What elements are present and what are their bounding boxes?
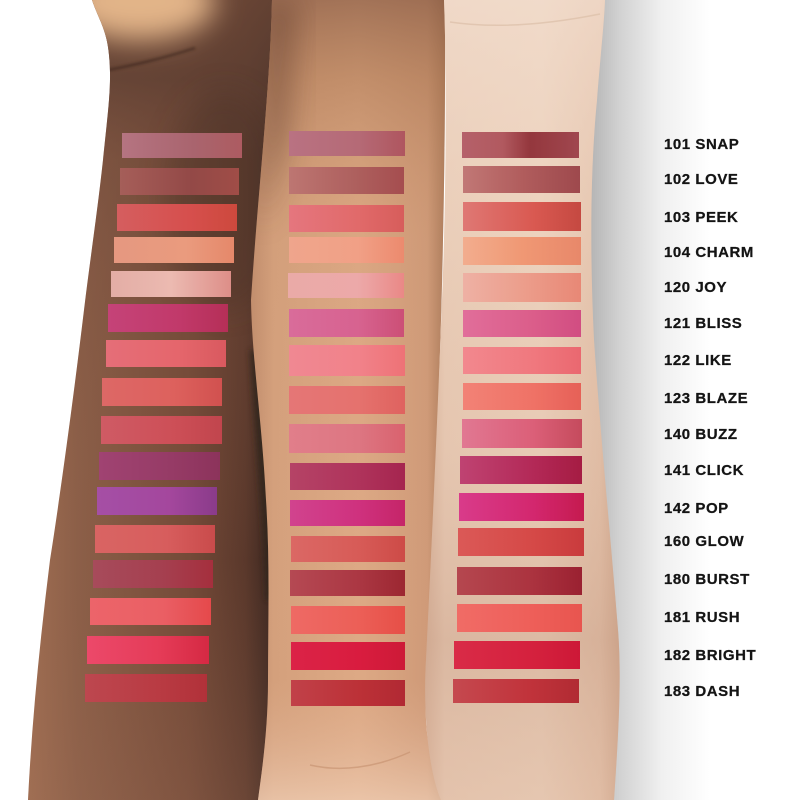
- label: 120 JOY: 120 JOY: [664, 279, 727, 296]
- background shadow: [590, 0, 710, 800]
- swatch: 123 BLAZE, fair: [463, 383, 581, 410]
- swatch: 183 DASH, deep: [85, 674, 207, 702]
- swatch: 142 POP, medium: [290, 500, 405, 526]
- swatch: 121 BLISS, fair: [463, 310, 581, 337]
- label: 122 LIKE: 122 LIKE: [664, 352, 732, 369]
- label: 123 BLAZE: 123 BLAZE: [664, 390, 748, 407]
- swatch: 104 CHARM, deep: [114, 237, 234, 263]
- swatch: 141 CLICK, medium: [290, 463, 405, 490]
- swatch: 103 PEEK, medium: [289, 205, 404, 232]
- swatch: 121 BLISS, medium: [289, 309, 404, 337]
- swatch: 140 BUZZ, fair: [462, 419, 582, 448]
- swatch: 181 RUSH, fair: [457, 604, 582, 632]
- swatch: 122 LIKE, deep: [106, 340, 226, 367]
- label: 160 GLOW: 160 GLOW: [664, 533, 744, 550]
- label: 102 LOVE: 102 LOVE: [664, 171, 738, 188]
- swatch: 120 JOY, fair: [463, 273, 581, 302]
- swatch: 120 JOY, deep: [111, 271, 231, 297]
- arm: fair skin tone: [425, 0, 620, 800]
- label: 141 CLICK: 141 CLICK: [664, 462, 744, 479]
- swatch: 141 CLICK, fair: [460, 456, 582, 484]
- swatch: 104 CHARM, fair: [463, 237, 581, 265]
- label: 121 BLISS: 121 BLISS: [664, 315, 742, 332]
- swatch: 102 LOVE, deep: [120, 168, 239, 195]
- swatch: 103 PEEK, fair: [463, 202, 581, 231]
- swatch: 182 BRIGHT, deep: [87, 636, 209, 664]
- label: 101 SNAP: 101 SNAP: [664, 136, 739, 153]
- swatch: 140 BUZZ, deep: [101, 416, 222, 444]
- swatch: 160 GLOW, fair: [458, 528, 584, 556]
- swatch: 180 BURST, fair: [457, 567, 582, 595]
- swatch: 182 BRIGHT, fair: [454, 641, 580, 669]
- label: 140 BUZZ: 140 BUZZ: [664, 426, 738, 443]
- swatch: 101 SNAP, medium: [289, 131, 405, 156]
- swatch: 180 BURST, medium: [290, 570, 405, 596]
- swatch: 142 POP, deep: [97, 487, 217, 515]
- swatch: 101 SNAP, fair: [462, 132, 579, 158]
- swatch: 160 GLOW, medium: [291, 536, 405, 562]
- swatch: 122 LIKE, medium: [289, 345, 405, 376]
- swatch: 123 BLAZE, deep: [102, 378, 222, 406]
- arm: deep skin tone: [28, 0, 285, 800]
- label: 104 CHARM: 104 CHARM: [664, 244, 754, 261]
- label: 180 BURST: 180 BURST: [664, 571, 750, 588]
- swatch: 104 CHARM, medium: [289, 237, 404, 263]
- swatch: 181 RUSH, medium: [291, 606, 405, 634]
- swatch: 182 BRIGHT, medium: [291, 642, 405, 670]
- swatch: 180 BURST, deep: [93, 560, 213, 588]
- swatch: 102 LOVE, medium: [289, 167, 404, 194]
- label: 181 RUSH: 181 RUSH: [664, 609, 740, 626]
- swatch: 160 GLOW, deep: [95, 525, 215, 553]
- swatch: 141 CLICK, deep: [99, 452, 220, 480]
- swatch: 101 SNAP, deep: [122, 133, 242, 158]
- swatch: 142 POP, fair: [459, 493, 584, 521]
- swatch: 120 JOY, medium: [288, 273, 404, 298]
- swatch: 102 LOVE, fair: [463, 166, 580, 193]
- swatch: 121 BLISS, deep: [108, 304, 228, 332]
- label: 142 POP: 142 POP: [664, 500, 729, 517]
- swatch: 103 PEEK, deep: [117, 204, 237, 231]
- arm: medium skin tone: [250, 0, 447, 800]
- label: 103 PEEK: 103 PEEK: [664, 209, 738, 226]
- label: 183 DASH: 183 DASH: [664, 683, 740, 700]
- swatch: 122 LIKE, fair: [463, 347, 581, 374]
- swatch: 181 RUSH, deep: [90, 598, 211, 625]
- swatch: 183 DASH, medium: [291, 680, 405, 706]
- swatch: 140 BUZZ, medium: [289, 424, 405, 453]
- swatch: 183 DASH, fair: [453, 679, 579, 703]
- label: 182 BRIGHT: 182 BRIGHT: [664, 647, 756, 664]
- swatch: 123 BLAZE, medium: [289, 386, 405, 414]
